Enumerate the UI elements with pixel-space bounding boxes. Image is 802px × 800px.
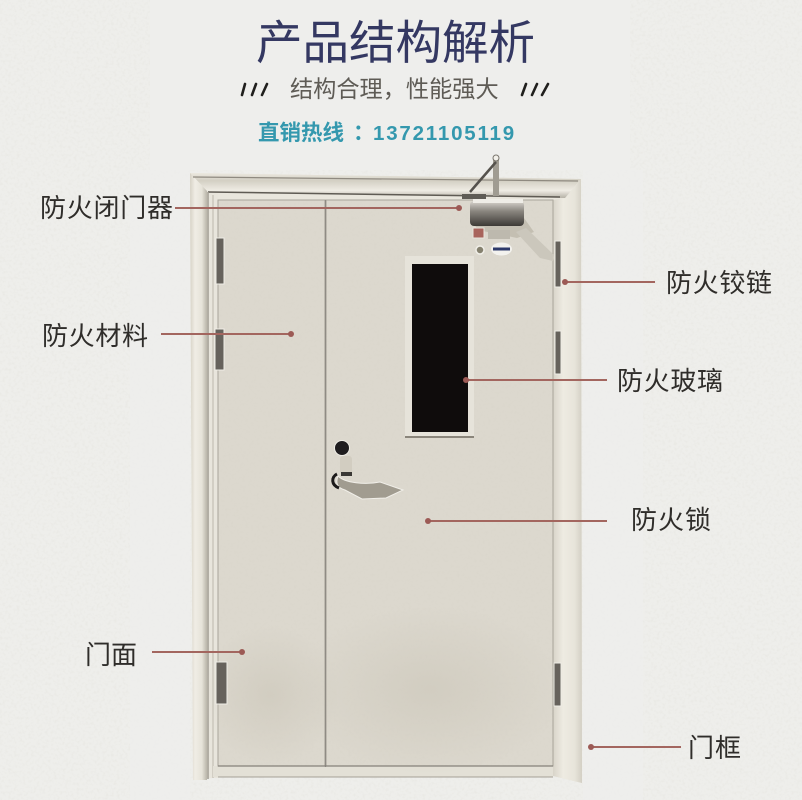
door frame [190, 173, 582, 783]
label: 门框 [588, 733, 741, 763]
label: 防火材料 [42, 321, 294, 351]
hotline: ： [353, 121, 375, 145]
door leaves [200, 200, 565, 777]
label: 防火材料: 防火材料 [42, 321, 148, 351]
door closer [462, 155, 554, 261]
label: 门面: 门面 [85, 640, 137, 670]
title: 产品结构解析 [256, 17, 535, 69]
lock cylinder [476, 246, 484, 254]
icon: left slashes [242, 84, 267, 95]
label: 防火闭门器: 防火闭门器 [40, 193, 173, 223]
door handle [333, 440, 403, 499]
rating label [488, 230, 510, 239]
door hinges [215, 238, 561, 706]
label: 防火玻璃 [463, 366, 723, 396]
door threshold [213, 766, 553, 777]
label: 防火铰链 [562, 268, 772, 298]
label: 防火锁 [425, 505, 711, 535]
label: 防火锁: 防火锁 [631, 505, 711, 535]
label: 防火闭门器 [40, 193, 462, 223]
label: 门框: 门框 [688, 733, 741, 763]
label: 防火铰链: 防火铰链 [666, 268, 772, 298]
label: 门面 [85, 640, 245, 670]
door illustration [190, 155, 582, 783]
fire glass window [405, 256, 474, 438]
brand badge [491, 242, 512, 256]
warning sticker [473, 228, 484, 238]
subtitle [242, 76, 548, 102]
hotline: 直销热线 [258, 121, 344, 145]
label: 防火玻璃: 防火玻璃 [617, 366, 723, 396]
icon: right slashes [522, 84, 548, 95]
hotline: 13721105119 [373, 122, 516, 145]
subtitle text: 结构合理，性能强大 [290, 76, 499, 102]
